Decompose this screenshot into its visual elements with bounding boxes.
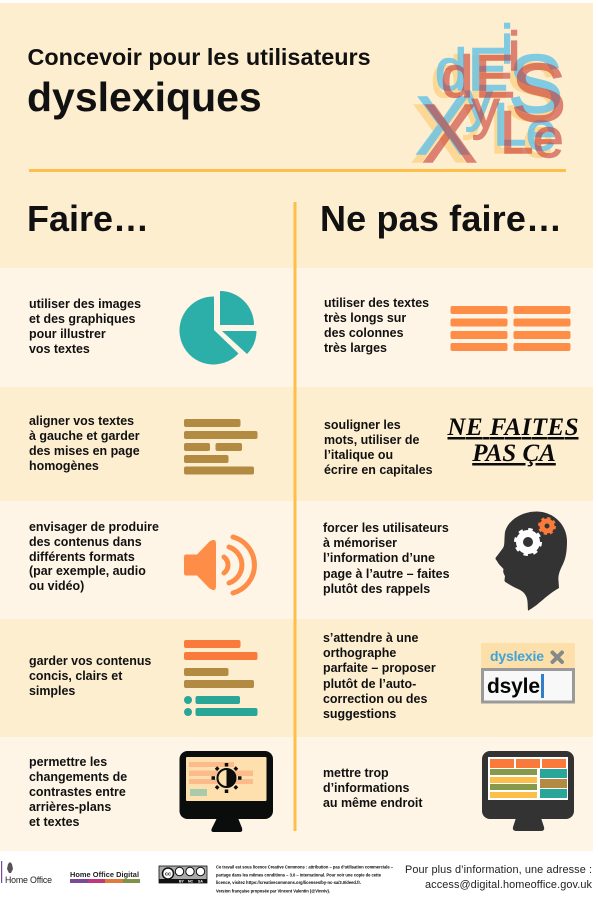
icon: dyslexie letter logo: i: [501, 13, 513, 75]
do 1 text: et des graphiques: [29, 312, 136, 326]
do 1 text: utiliser des images: [29, 297, 141, 311]
icon: dyslexie letter logo: E: [468, 36, 508, 103]
example: underlined italic capitals: [446, 414, 578, 467]
footer: Creative Commons badge: NC: [188, 880, 194, 884]
do 5 text: changements de: [29, 770, 127, 784]
do 4 text: garder vos contenus: [29, 654, 151, 668]
footer: Creative Commons badge: [159, 866, 207, 884]
footer: licence text: Ce travail est sous licence Creative Commons : attribution – pas d’utilisation commerciale –: [216, 864, 394, 870]
icon: dyslexie letter logo: X: [411, 87, 466, 180]
footer: Home Office logo: Home Office: [5, 875, 52, 885]
dont 3 text: forcer les utilisateurs: [323, 521, 449, 535]
icon: dyslexie letter logo: d: [441, 45, 473, 110]
dont 1 text: très larges: [324, 341, 387, 355]
footer: licence text: Version française proposée par Vincent Valentin (@Vinrév).: [216, 888, 330, 894]
icon: dyslexie letter logo: X: [422, 87, 477, 180]
dont 3 text: page à l’autre – faites: [323, 567, 450, 581]
do 2 text: des mises en page: [29, 444, 140, 458]
dont 4 text: parfaite – proposer: [323, 661, 436, 675]
do 3 text: différents formats: [29, 550, 135, 564]
footer: Creative Commons badge: SA: [198, 880, 203, 884]
footer: Creative Commons badge: BY: [179, 880, 185, 884]
footer: licence text: partage dans les mêmes conditions – 3.0 – international. Pour voir une copie de cette: [216, 872, 382, 878]
dont 1 text: très longs sur: [324, 311, 406, 325]
do 2 text: à gauche et garder: [29, 429, 140, 443]
dont 2 text: souligner les: [324, 418, 401, 432]
do 2 text: homogènes: [29, 459, 99, 473]
dont 2 text: mots, utiliser de: [324, 433, 419, 447]
icon: dyslexie letter logo: X: [415, 79, 470, 172]
row backgrounds: [0, 268, 593, 851]
icon: head with gears: [496, 512, 567, 611]
header divider: [29, 169, 566, 172]
footer: contact: Pour plus d’information, une adresse :: [405, 864, 592, 876]
column divider: [294, 202, 296, 831]
icon: dyslexie letter logo: e: [523, 107, 554, 169]
icon: monitor with contrast: [180, 751, 273, 832]
icon: dyslexie letter logo: d: [435, 38, 467, 103]
dont 2 text: l’italique ou: [324, 448, 393, 462]
dont 3 text: à mémoriser: [323, 536, 397, 550]
do 1 text: pour illustrer: [29, 327, 106, 341]
title: dyslexiques: [27, 74, 262, 120]
dont 2 text: écrire en capitales: [324, 463, 433, 477]
dont 4 text: s’attendre à une: [323, 631, 418, 645]
example: underlined italic capitals: PAS ÇA: [471, 440, 556, 467]
icon: autocorrect widget: dsyle: [487, 675, 540, 698]
dont 4 text: orthographe: [323, 646, 396, 660]
do 2 text: aligner vos textes: [29, 414, 134, 428]
icon: dyslexie letter logo: S: [504, 45, 559, 138]
do 3 text: des contenus dans: [29, 535, 142, 549]
do 5 text: et textes: [29, 815, 80, 829]
icon: concise content bars: [184, 640, 258, 716]
title: [27, 44, 371, 120]
footer: Home Office Digital logo: Home Office Digital: [70, 870, 139, 879]
icon: dyslexie letter logo: d: [431, 45, 463, 110]
footer: contact: [405, 864, 593, 891]
icon: dyslexie letter logo: y: [472, 78, 500, 140]
do 5 text: contrastes entre: [29, 785, 126, 799]
icon: dyslexie letter logo: L: [500, 99, 533, 166]
icon: dyslexie letter logo: i: [508, 20, 520, 82]
icon: dyslexie letter logo: [411, 13, 566, 180]
icon: dyslexie letter logo: y: [465, 70, 493, 132]
do 4 text: concis, clairs et: [29, 669, 122, 683]
example: underlined italic capitals: NE FAITES: [446, 414, 578, 441]
dont 4 text: correction ou des: [323, 692, 427, 706]
do 5 text: arrières-plans: [29, 800, 111, 814]
footer: Creative Commons badge: cc: [165, 872, 171, 878]
column heading: Ne pas faire: Ne pas faire…: [320, 198, 562, 239]
icon: autocorrect widget: [481, 643, 575, 702]
dont 5 text: d’informations: [323, 781, 409, 795]
column heading: Faire: Faire…: [27, 198, 149, 239]
dont 1 text: des colonnes: [324, 326, 404, 340]
icon: dyslexie letter logo: E: [468, 43, 508, 110]
icon: left aligned text bars: [184, 419, 258, 474]
icon: autocorrect widget: dyslexie: [490, 648, 544, 664]
do 5 text: permettre les: [29, 755, 107, 769]
dont 5 text: au même endroit: [323, 796, 423, 810]
icon: pie chart: [179, 291, 256, 364]
footer: contact: access@digital.homeoffice.gov.uk: [425, 879, 593, 891]
icon: speaker: [184, 537, 254, 593]
footer: Home Office logo: [1, 861, 52, 885]
icon: wide columns bars: [450, 306, 570, 351]
footer: Home Office Digital logo: [70, 870, 140, 883]
icon: dyslexie letter logo: S: [511, 46, 566, 139]
dont 4 text: plutôt de l’auto-: [323, 677, 416, 691]
header band: [0, 3, 593, 268]
icon: dyslexie letter logo: e: [526, 100, 557, 162]
icon: dyslexie letter logo: L: [493, 91, 526, 158]
dont 1 text: utiliser des textes: [324, 296, 429, 310]
dont 3 text: l’information d’une: [323, 551, 435, 565]
icon: dyslexie letter logo: e: [533, 107, 564, 169]
do 3 text: (par exemple, audio: [29, 564, 146, 578]
do 4 text: simples: [29, 684, 75, 698]
do 3 text: ou vidéo): [29, 579, 84, 593]
icon: dyslexie letter logo: L: [490, 99, 523, 166]
icon: dyslexie letter logo: S: [508, 37, 563, 130]
do 1 text: vos textes: [29, 342, 90, 356]
footer: licence text: licence, visitez https://creativecommons.org/licenses/by-nc-sa/3.0/deed.fr.: [216, 880, 361, 885]
icon: dyslexie letter logo: y: [462, 78, 490, 140]
do 3 text: envisager de produire: [29, 520, 159, 534]
dont 5 text: mettre trop: [323, 766, 389, 780]
icon: crowded monitor: [482, 751, 574, 831]
title: Concevoir pour les utilisateurs: [28, 44, 371, 70]
icon: dyslexie letter logo: E: [475, 43, 515, 110]
dont 4 text: suggestions: [323, 707, 396, 721]
dont 3 text: plutôt des rappels: [323, 582, 430, 596]
